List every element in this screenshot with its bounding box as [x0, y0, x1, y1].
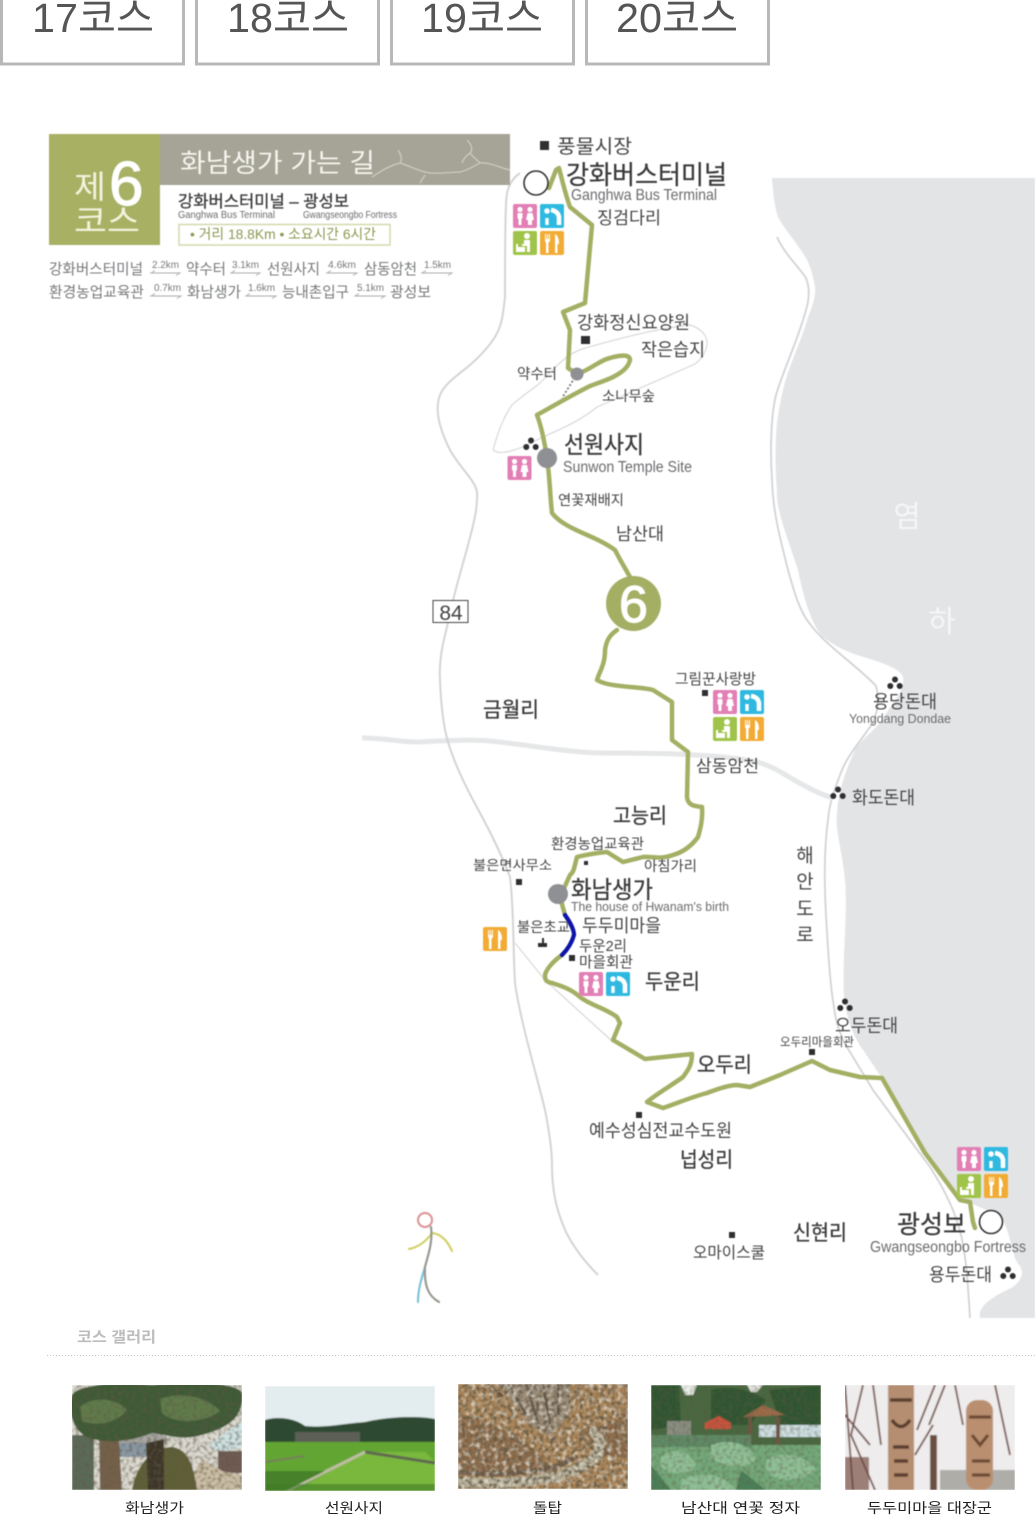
photo: 두두미마을 대장군 — [845, 1385, 1015, 1490]
distance row 1: 1.5km — [424, 260, 451, 271]
label: 넙성리: 넙성리 — [680, 1149, 733, 1172]
tab: course 19 — [392, 0, 574, 64]
dots: 오두돈대 — [837, 998, 853, 1011]
photo: 돌탑 — [458, 1384, 628, 1489]
icon: restaurant at 불은 — [483, 927, 507, 951]
label: 고능리: 고능리 — [613, 805, 667, 828]
distance row 1: 4.6km — [328, 260, 356, 271]
sea label: 염: 염 — [893, 501, 921, 534]
marker: 두운2리 마을회관 — [569, 955, 575, 961]
label: 오두리마을회관: 오두리마을회관 — [780, 1035, 854, 1049]
marker: 불은초교 — [538, 938, 547, 947]
label: 두운리: 두운리 — [645, 971, 700, 994]
distance row 1: 삼동암천 — [364, 261, 417, 278]
marker: 풍물시장 — [540, 141, 549, 150]
distance and time box — [179, 224, 390, 245]
distance row 1: 2.2km — [152, 260, 179, 271]
label: 용당돈대: 용당돈대 — [873, 692, 937, 712]
label: Sunwon Temple Site: Sunwon Temple Site — [563, 459, 692, 476]
waypoint: 선원사지 — [537, 448, 557, 468]
dots: 용두돈대 — [1000, 1266, 1016, 1279]
label: 광성보: 광성보 — [897, 1211, 966, 1239]
waypoint: 약수터 — [570, 368, 584, 380]
marker: 강화정신요양원 — [581, 336, 590, 344]
dotted spring path — [562, 374, 577, 398]
tab: course 18 — [196, 0, 378, 64]
marker: 오마이스쿨 — [729, 1232, 735, 1238]
gray title bar: 화남생가 가는 길 — [180, 148, 375, 178]
label: 두운2리: 두운2리 — [579, 938, 627, 955]
national road 84 — [438, 173, 598, 1275]
distance row 2: 1.6km — [248, 283, 275, 294]
map markers — [516, 141, 1016, 1279]
route title: 강화버스터미널 – 광성보 — [178, 192, 349, 211]
label: 해안도로 vertical: 도 — [796, 899, 814, 920]
caption: 화남생가: 화남생가 — [125, 1500, 184, 1516]
caption: 두두미마을 대장군: 두두미마을 대장군 — [867, 1500, 992, 1516]
label: 두두미마을: 두두미마을 — [582, 916, 661, 936]
course title panel — [49, 134, 510, 245]
marker: 예수성심전교수도원 — [636, 1112, 642, 1118]
east-west road — [362, 738, 833, 798]
icons: 그림꾼사랑방 — [713, 690, 764, 741]
road sign 84: 84 — [439, 602, 463, 625]
route badge 6 — [606, 576, 661, 634]
label: 약수터: 약수터 — [517, 366, 557, 383]
distance row 1: 3.1km — [232, 260, 259, 271]
label: Yongdang Dondae: Yongdang Dondae — [849, 711, 951, 726]
photo: 선원사지 — [265, 1386, 435, 1491]
photo gallery — [71, 1383, 1015, 1491]
caption: 남산대 연꽃 정자: 남산대 연꽃 정자 — [681, 1500, 800, 1516]
english end name: Gwangseongbo Fortress — [303, 210, 397, 221]
icon: restroom at temple site — [508, 456, 532, 480]
label: 해안도로 vertical: 로 — [796, 925, 814, 946]
label: 해안도로 vertical — [796, 845, 814, 946]
distance row 2: 화남생가 — [187, 284, 241, 301]
distance row 2: 광성보 — [390, 284, 431, 301]
facility icons — [483, 204, 1008, 1198]
marker: 오두리마을회관 — [809, 1049, 815, 1055]
distance row 2 — [49, 283, 431, 301]
label: 오마이스쿨: 오마이스쿨 — [693, 1244, 765, 1262]
waypoint: 화남생가 — [548, 884, 568, 904]
green course badge — [49, 134, 160, 245]
label: The house of Hwanam's birth: The house of Hwanam's birth — [571, 899, 729, 914]
distance row 1: 선원사지 — [267, 261, 320, 278]
label: 화남생가: 화남생가 — [571, 877, 653, 904]
label: 삼동암천: 삼동암천 — [696, 757, 759, 776]
distance row 1: 약수터 — [186, 261, 226, 278]
label: 해안도로 vertical: 해 — [796, 845, 814, 867]
green course badge: 제 — [74, 169, 106, 205]
tab: course 17 — [2, 0, 184, 64]
distance row 2: 환경농업교육관 — [49, 284, 144, 301]
label: 오두돈대: 오두돈대 — [835, 1016, 898, 1036]
icons: bus terminal — [513, 204, 564, 255]
route line: course 6 green — [537, 168, 975, 1228]
road sign 84 — [433, 600, 468, 625]
photo: 남산대 연꽃 정자 — [651, 1385, 821, 1490]
caption: 돌탑: 돌탑 — [533, 1500, 562, 1516]
dots: 선원사지 — [523, 438, 539, 450]
sea label: 하: 하 — [928, 606, 956, 639]
green course badge: 6 — [109, 150, 143, 219]
dots: 화도돈대 — [830, 786, 846, 799]
marker: 불은면사무소 — [516, 879, 522, 885]
gallery captions — [125, 1500, 992, 1516]
distance row 2: 0.7km — [154, 283, 181, 294]
label: 아침가리: 아침가리 — [644, 858, 697, 874]
label: 불은초교: 불은초교 — [517, 919, 570, 935]
marker: 그림꾼사랑방 — [702, 690, 708, 696]
photo: 화남생가 — [72, 1385, 242, 1490]
label: Ganghwa Bus Terminal: Ganghwa Bus Terminal — [571, 187, 717, 204]
icons: 광성보 — [957, 1147, 1008, 1198]
distance row 1 — [49, 260, 452, 278]
label: 용두돈대: 용두돈대 — [929, 1265, 992, 1285]
label: 해안도로 vertical: 안 — [796, 871, 814, 893]
icon: walking figure — [409, 1213, 452, 1302]
label: 신현리: 신현리 — [793, 1222, 847, 1245]
end marker — [980, 1210, 1002, 1234]
label: 남산대: 남산대 — [616, 524, 664, 544]
start marker — [524, 171, 548, 195]
distance row 2: 능내촌입구 — [282, 284, 349, 301]
distance and time box: • 거리 18.8Km • 소요시간 6시간 — [190, 226, 376, 242]
label: 소나무숲: 소나무숲 — [602, 388, 655, 404]
label: 강화버스터미널: 강화버스터미널 — [566, 160, 727, 190]
dots: 용당돈대 — [887, 676, 903, 689]
label: 선원사지: 선원사지 — [564, 432, 644, 459]
label: 풍물시장: 풍물시장 — [557, 136, 632, 158]
course tabs — [2, 0, 768, 64]
side road to 두운리 — [515, 943, 612, 1041]
label: 금월리: 금월리 — [483, 699, 539, 722]
label: 예수성심전교수도원: 예수성심전교수도원 — [589, 1121, 732, 1141]
distance row 1: 강화버스터미널 — [49, 261, 143, 278]
label: 환경농업교육관: 환경농업교육관 — [551, 836, 644, 853]
label: 화도돈대: 화도돈대 — [852, 788, 915, 808]
map base: sea and roads — [362, 173, 1035, 1318]
caption: 선원사지: 선원사지 — [325, 1500, 383, 1516]
label: 오두리: 오두리 — [697, 1054, 752, 1077]
english start name: Ganghwa Bus Terminal — [178, 210, 275, 221]
label: 강화정신요양원: 강화정신요양원 — [577, 313, 690, 333]
marker: 환경농업교육관 — [584, 861, 588, 865]
distance list — [49, 260, 452, 301]
label: Gwangseongbo Fortress: Gwangseongbo Fortress — [870, 1239, 1026, 1256]
icons: 두운리 — [579, 972, 630, 996]
hiking route — [524, 168, 1002, 1234]
label: 마을회관: 마을회관 — [579, 954, 633, 971]
loop road near 작은습지 — [493, 325, 707, 452]
green course badge: 코스 — [74, 203, 140, 239]
label: 작은습지: 작은습지 — [641, 340, 705, 360]
gray title bar — [160, 134, 510, 185]
sea area — [772, 178, 1035, 1318]
map labels — [433, 136, 1026, 1285]
coastal road — [771, 237, 970, 1318]
label: 그림꾼사랑방: 그림꾼사랑방 — [675, 671, 756, 688]
route badge 6: 6 — [619, 576, 648, 634]
distance row 2: 5.1km — [357, 283, 384, 294]
label: 연꽃재배지: 연꽃재배지 — [558, 492, 624, 508]
gallery heading: 코스 갤러리 — [77, 1329, 156, 1346]
label: 불은면사무소: 불은면사무소 — [473, 858, 552, 873]
tab: course 20 — [586, 0, 768, 64]
label: 징검다리: 징검다리 — [597, 208, 661, 228]
route line: blue section — [562, 915, 574, 955]
